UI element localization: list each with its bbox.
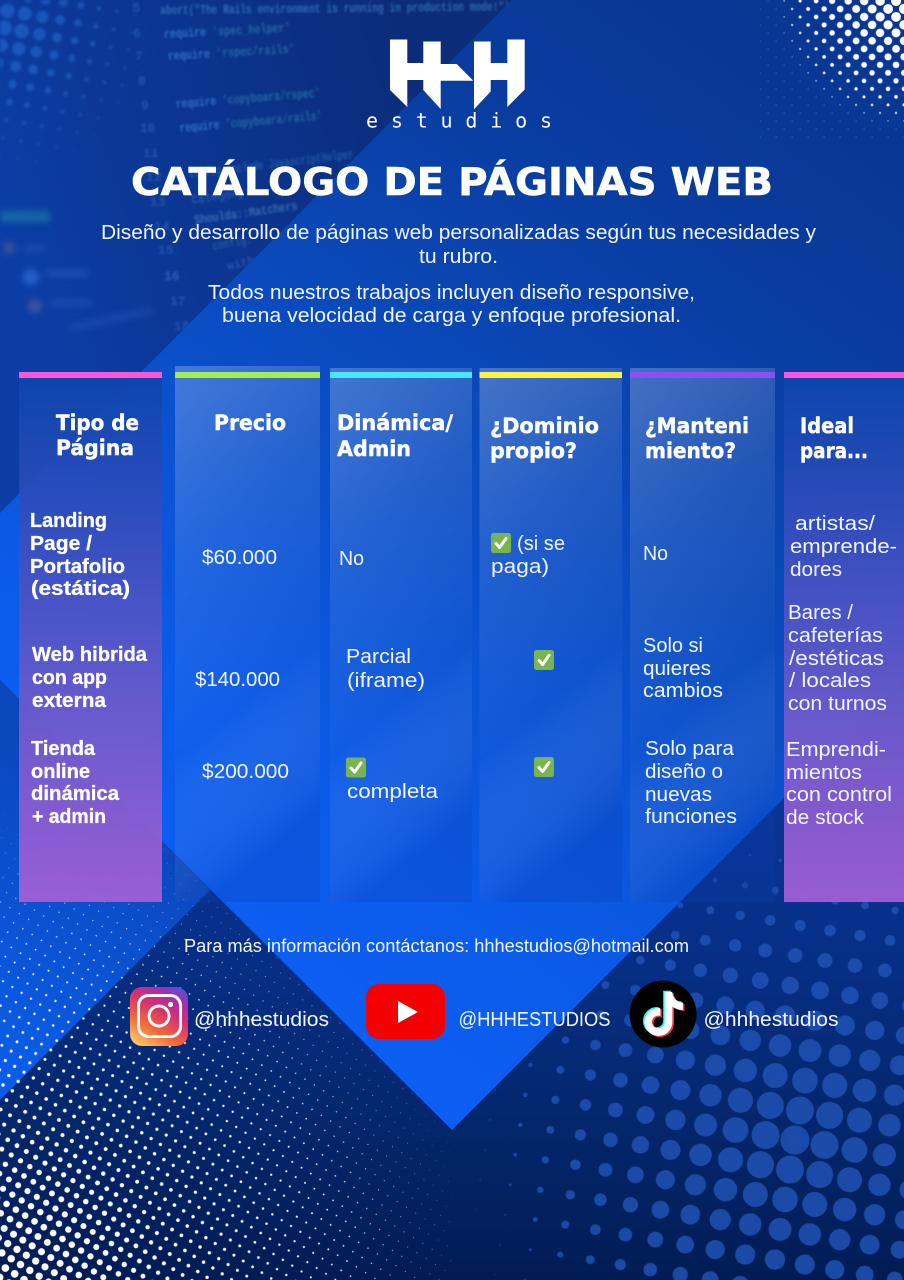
header: ideal para xyxy=(800,414,868,463)
halftone: bottom left dots xyxy=(0,800,460,1280)
value: artistas: dores xyxy=(790,559,842,581)
column: mantenimiento xyxy=(630,368,775,902)
price: híbrida: $140.000 xyxy=(195,669,280,691)
header: tipo de página xyxy=(56,411,139,460)
value: emprendimientos: con control xyxy=(786,784,892,806)
header: dominio xyxy=(490,414,599,463)
value: bares xyxy=(788,602,887,715)
code photo panel: 16 xyxy=(164,269,180,284)
code photo panel: 15 xyxy=(158,243,174,258)
row label: tienda xyxy=(31,738,120,828)
value: solo para diseño: diseño o xyxy=(645,761,723,783)
value: bares: Bares / xyxy=(788,602,853,624)
halftone: bottom right circles xyxy=(454,854,904,1280)
column: tipo de página xyxy=(19,372,162,902)
icon: check xyxy=(491,533,511,553)
handle: tiktok: @hhhestudios xyxy=(704,1009,838,1031)
value: solo para diseño: nuevas xyxy=(645,784,712,806)
value: solo si quieres cambios xyxy=(643,635,723,702)
value: artistas: artistas/ xyxy=(795,513,875,535)
header: mantenimiento: miento? xyxy=(645,439,736,463)
value: artistas: emprende- xyxy=(790,536,897,558)
header: tipo de página: Tipo de xyxy=(56,411,139,435)
logo xyxy=(366,40,552,132)
row label: web híbrida: Web hibrida xyxy=(32,644,148,666)
header: ideal para: Ideal xyxy=(800,414,854,438)
value: artistas xyxy=(790,513,897,581)
halftone: top right dots xyxy=(760,0,904,140)
header: tipo de página: Página xyxy=(56,436,134,460)
code photo panel xyxy=(0,0,520,520)
code photo panel: 11 xyxy=(143,146,159,161)
column: dinámica / admin xyxy=(330,368,472,902)
value: solo para diseño: Solo para xyxy=(645,738,735,760)
column: precio xyxy=(175,366,320,902)
icon: check xyxy=(534,757,554,777)
icon: instagram xyxy=(130,987,188,1046)
icon: check xyxy=(534,650,554,670)
value: no: No xyxy=(339,548,364,570)
code photo panel: 6 xyxy=(133,26,141,41)
code photo panel: 13 xyxy=(150,195,166,210)
intro text xyxy=(101,222,816,327)
code photo panel: 18 xyxy=(174,319,190,334)
icon: check xyxy=(346,758,366,778)
value: si se paga: paga) xyxy=(491,556,549,578)
icon: tiktok xyxy=(630,980,696,1048)
value: emprendimientos xyxy=(786,739,892,829)
code photo panel: 5 xyxy=(132,1,140,17)
value: solo si quieres cambios: cambios xyxy=(643,680,723,702)
header: dinámica xyxy=(337,411,453,461)
header: ideal para: para... xyxy=(800,439,868,463)
value: bares: /estéticas xyxy=(789,648,884,670)
row label: landing: Landing xyxy=(30,510,107,532)
code photo panel: require 'copyboara/rspec' xyxy=(175,86,321,112)
header: dinámica: Admin xyxy=(337,437,411,461)
row label: landing: Portafolio xyxy=(30,556,125,578)
value: emprendimientos: mientos xyxy=(786,762,862,784)
intro text: buena velocidad de carga y enfoque profesional. xyxy=(222,305,681,327)
code photo panel: require 'spec_helper' xyxy=(163,20,291,42)
intro text: Diseño y desarrollo de páginas web personalizadas según tus necesidades y xyxy=(101,222,816,244)
code photo panel: 12 xyxy=(146,170,162,185)
code photo panel: 8 xyxy=(138,74,146,89)
value: emprendimientos: Emprendi- xyxy=(786,739,886,761)
header: mantenimiento xyxy=(645,414,749,463)
price: landing: $60.000 xyxy=(202,547,277,569)
value: bares: / locales xyxy=(789,670,871,692)
row label: web híbrida: externa xyxy=(32,690,107,712)
value: parcial xyxy=(346,646,425,692)
value: solo si quieres cambios: quieres xyxy=(643,658,711,680)
header: precio: Precio xyxy=(214,411,286,435)
handle: youtube: @HHHESTUDIOS xyxy=(458,1009,610,1031)
code photo panel: with xyxy=(226,253,256,274)
intro text: Todos nuestros trabajos incluyen diseño responsive, xyxy=(208,282,695,304)
intro text: tu rubro. xyxy=(419,246,498,268)
value: emprendimientos: de stock xyxy=(786,807,865,829)
value: solo si quieres cambios: Solo si xyxy=(643,635,703,657)
column: ideal para xyxy=(784,372,904,902)
row label: tienda: Tienda xyxy=(31,738,96,760)
header: mantenimiento: ¿Manteni xyxy=(645,414,749,438)
code photo panel: require 'copyboara/rails' xyxy=(179,109,323,136)
code photo panel: config.include JavascriptHelper xyxy=(189,147,354,182)
price: tienda: $200.000 xyxy=(202,761,289,783)
row label: web híbrida: con app xyxy=(32,667,107,689)
header: dinámica: Dinámica/ xyxy=(337,411,453,435)
logo: estudios xyxy=(366,108,552,132)
value: no: No xyxy=(643,543,668,565)
code photo panel: 14 xyxy=(154,219,170,234)
value: bares: cafeterías xyxy=(788,625,883,647)
value: solo para diseño: funciones xyxy=(645,806,737,828)
value: parcial: (iframe) xyxy=(347,670,425,692)
handle: instagram: @hhhestudios xyxy=(194,1009,329,1031)
contact line: Para más información contáctanos: hhhestudios@hotmail.com xyxy=(184,936,689,956)
title: CATÁLOGO DE PÁGINAS WEB xyxy=(131,158,773,205)
row label: tienda: + admin xyxy=(32,806,106,828)
value: completa: completa xyxy=(347,781,439,803)
code photo panel: 9 xyxy=(141,98,149,113)
row label: tienda: online xyxy=(31,761,90,783)
header: dominio: ¿Dominio xyxy=(490,414,599,438)
value: solo para diseño xyxy=(645,738,737,828)
code photo panel: require 'rspec/rails' xyxy=(167,41,295,64)
value: si se paga xyxy=(491,533,565,578)
code photo panel: 10 xyxy=(140,121,156,136)
code photo panel: 7 xyxy=(135,49,143,64)
code photo panel: Category. xyxy=(190,185,252,208)
row label: tienda: dinámica xyxy=(31,783,120,805)
value: bares: con turnos xyxy=(788,693,887,715)
value: si se paga: (si se xyxy=(517,533,565,555)
row label: landing: Page / xyxy=(30,533,92,555)
row label: web híbrida xyxy=(32,644,148,712)
code photo panel: config. xyxy=(211,232,253,254)
row label: landing: (estática) xyxy=(31,578,130,600)
row label: landing xyxy=(30,510,130,600)
code photo panel: Shoulda::Matchers xyxy=(193,199,299,228)
value: parcial: Parcial xyxy=(346,646,411,668)
icon: youtube xyxy=(366,984,445,1039)
column: dominio propio xyxy=(480,368,622,902)
header: dominio: propio? xyxy=(490,439,577,463)
code photo panel: 17 xyxy=(170,294,186,309)
